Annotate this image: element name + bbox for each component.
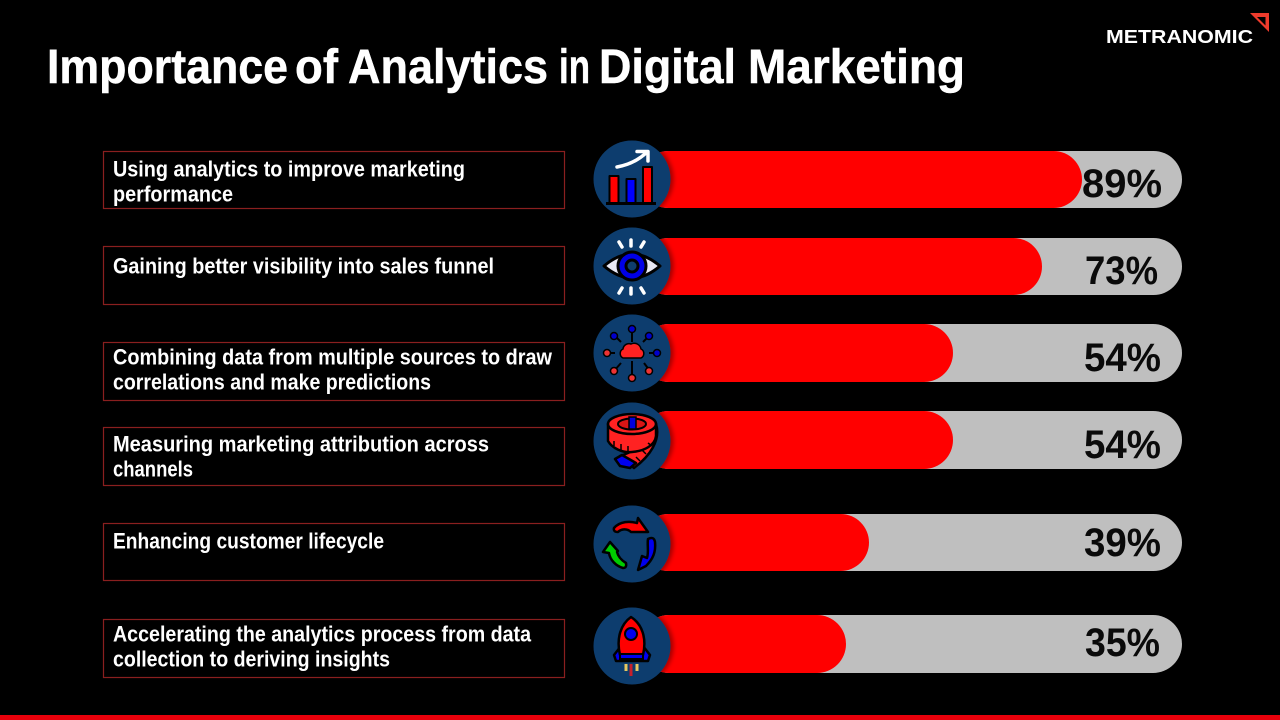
label box 3: correlations and make predictions [113, 370, 431, 394]
row 5: lifecycle [104, 506, 1182, 582]
label box 4: channels [113, 456, 193, 482]
bar 35% [640, 615, 1182, 673]
title: of [295, 41, 339, 94]
label box 4 [104, 428, 564, 486]
icon: recycle arrows [594, 506, 670, 582]
label box 5 [104, 524, 564, 580]
bar 54%: 54% [1084, 336, 1161, 380]
row 6: analytics process [104, 608, 1182, 684]
label box 6: Accelerating the analytics process from data [113, 622, 532, 646]
title [47, 41, 965, 94]
label box 4: Measuring marketing attribution across [113, 432, 489, 456]
icon: bar chart with arrow [594, 140, 670, 218]
bar 89% [640, 151, 1182, 208]
label box 5: Enhancing customer lifecycle [113, 528, 384, 554]
label box 1 [104, 152, 564, 208]
bar 39%: 39% [1084, 521, 1161, 565]
title: Marketing [748, 41, 965, 94]
bar 35%: 35% [1085, 621, 1160, 665]
bar 89%: 89% [1082, 162, 1162, 206]
bar 54% [640, 411, 1182, 469]
title: Importance [47, 41, 288, 94]
label box 1: Using analytics to improve marketing [113, 156, 465, 182]
row 4: attribution [104, 402, 1182, 486]
label box 2 [104, 246, 564, 304]
title: in [559, 41, 590, 94]
bar 73% [640, 238, 1182, 295]
bottom red rule [0, 715, 1280, 720]
icon: measuring tape [594, 402, 670, 480]
row 1: marketing performance [104, 140, 1182, 218]
logo: Metranomic [1106, 13, 1269, 47]
title: Digital [599, 41, 736, 94]
label box 2: Gaining better visibility into sales funnel [113, 254, 494, 278]
label box 3 [104, 342, 564, 400]
icon: data cloud network [594, 314, 670, 392]
logo: Metranomic: METRANOMIC [1106, 26, 1253, 47]
row 2: sales funnel [104, 228, 1182, 304]
bar 73%: 73% [1085, 249, 1158, 293]
row 3: combining data [104, 314, 1182, 400]
icon: eye [594, 228, 670, 304]
icon: rocket [594, 608, 670, 684]
label box 3: Combining data from multiple sources to draw [113, 344, 553, 370]
title: Analytics [348, 41, 548, 94]
bar 39% [640, 514, 1182, 571]
label box 6: collection to deriving insights [113, 646, 390, 672]
label box 6 [104, 620, 564, 678]
bar 54%: 54% [1084, 423, 1161, 467]
bar 54% [640, 324, 1182, 382]
label box 1: performance [113, 182, 233, 206]
